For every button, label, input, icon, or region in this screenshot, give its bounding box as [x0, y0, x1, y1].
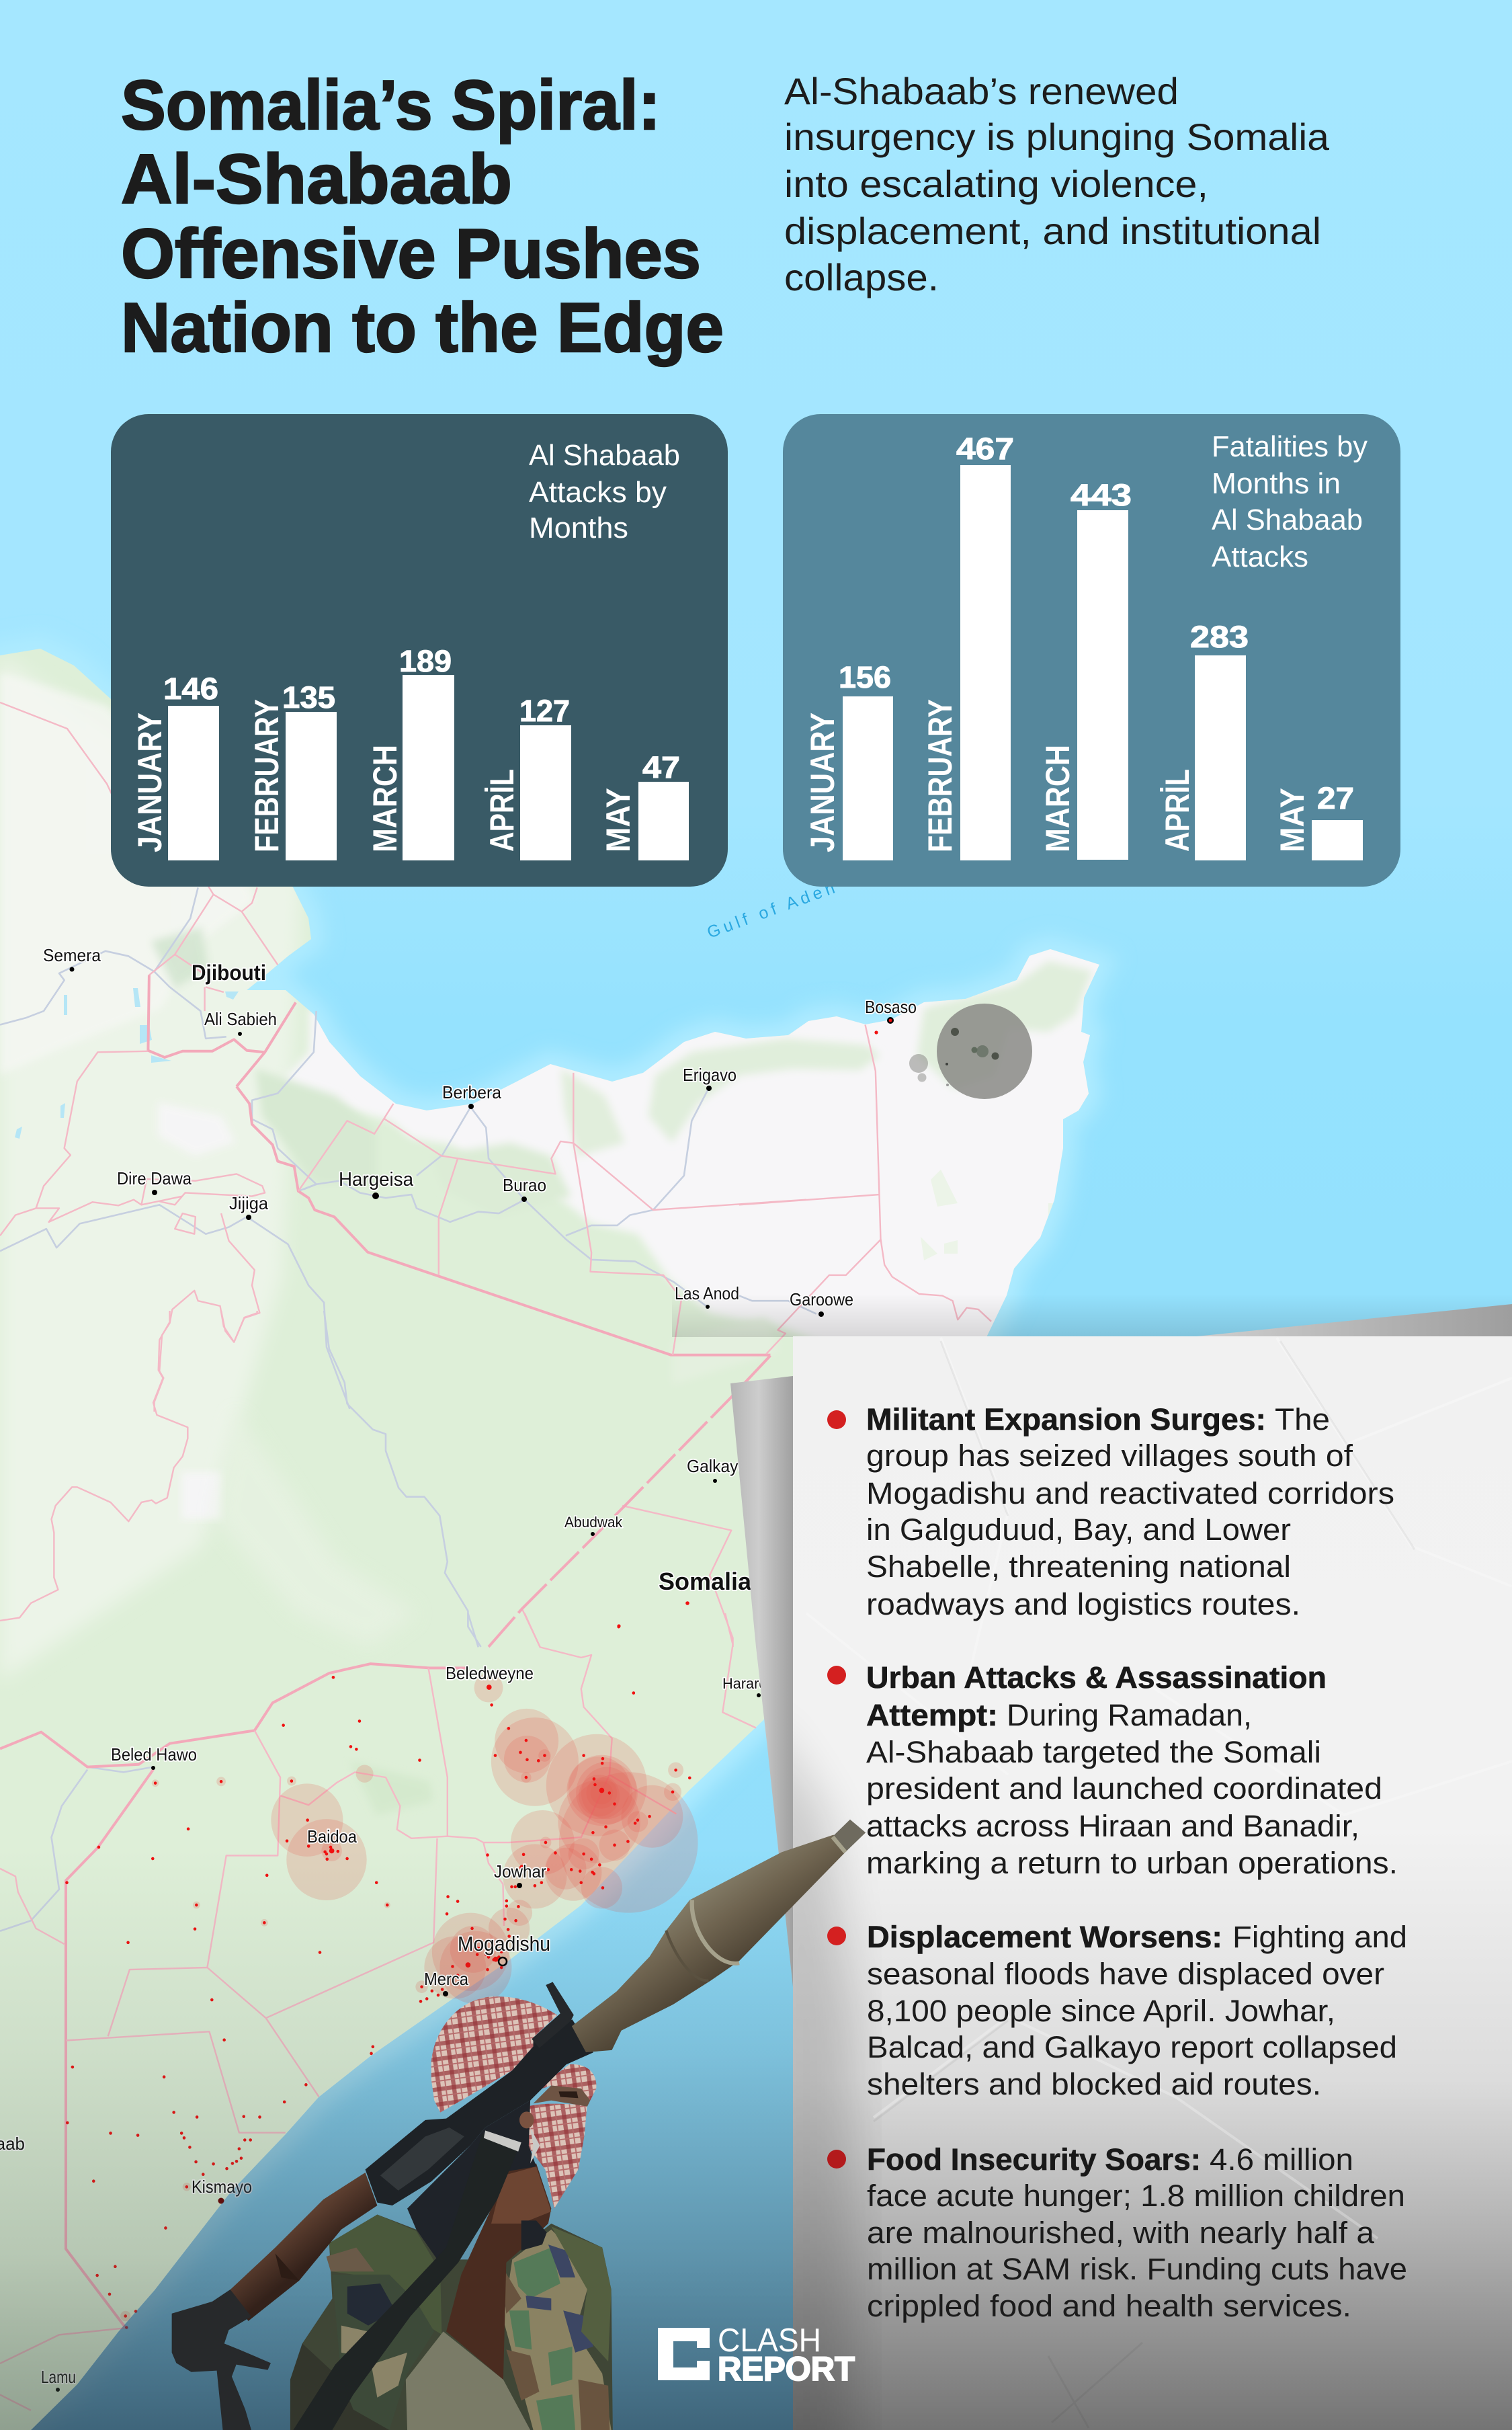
bar values: 47: [642, 750, 680, 784]
bars: [843, 465, 1363, 860]
subtitle: Al-Shabaab’s renewed: [784, 70, 1179, 112]
map labels: Gulf of Aden: [704, 877, 841, 942]
subtitle: displacement, and institutional: [784, 210, 1321, 252]
key point: food insecurity: face acute hunger; 1.8 million children: [867, 2179, 1405, 2213]
chart title: Attacks by: [529, 476, 667, 509]
map labels: Beled Hawo: [111, 1744, 197, 1765]
bar values: [839, 432, 1354, 815]
key point: urban attacks: During Ramadan,: [1007, 1698, 1252, 1732]
logo mark: [658, 2328, 710, 2380]
title: Somalia’s Spiral:: [121, 67, 661, 145]
map labels: Hargeisa: [339, 1169, 414, 1190]
bar values: 135: [282, 680, 335, 715]
launcher stock: [407, 2101, 547, 2263]
sling: [293, 2134, 518, 2430]
vest strap right: [551, 2226, 612, 2361]
gray historic event circles: [909, 1004, 1032, 1099]
month labels: MARCH: [1039, 745, 1077, 852]
lower dark jacket: [290, 2343, 389, 2430]
key point: displacement: seasonal floods have displaced over: [867, 1957, 1384, 1991]
map labels: Semera: [43, 945, 101, 965]
subtitle: collapse.: [784, 256, 939, 298]
soldier figure: [172, 1982, 613, 2430]
land base: [0, 649, 1099, 2430]
map labels: Burao: [503, 1175, 546, 1195]
sling buckle and finger: [484, 2128, 540, 2164]
key point: food insecurity: million at SAM risk. Funding cuts have: [867, 2252, 1407, 2286]
rivers: [0, 887, 816, 1931]
logo wordmark: CLASH: [718, 2322, 821, 2359]
map labels: Somalia: [659, 1568, 752, 1595]
panel: attacks by month: [111, 414, 728, 887]
bar values: 127: [519, 694, 570, 728]
RPG warhead: [572, 1820, 866, 2052]
arm and hand: [446, 2164, 551, 2380]
map labels: Bosaso: [865, 997, 917, 1017]
map labels: Las Anod: [675, 1283, 739, 1303]
map labels: Erigavo: [683, 1065, 737, 1085]
key point: food insecurity: Food Insecurity Soars:: [867, 2142, 1201, 2177]
key point: militant expansion: [827, 1402, 1394, 1621]
key point: food insecurity: are malnourished, with nearly half a: [867, 2216, 1375, 2250]
bar values: 443: [1070, 478, 1132, 512]
chart title: Fatalities by: [1212, 430, 1368, 463]
title: [121, 67, 724, 367]
bar values: 156: [839, 660, 891, 694]
month labels: [804, 699, 1311, 852]
key point: displacement: [827, 1920, 1407, 2101]
map labels: Lamu: [41, 2367, 76, 2387]
month labels: APRİL: [483, 769, 521, 852]
subtitle: into escalating violence,: [784, 163, 1208, 205]
month labels: MARCH: [366, 745, 404, 852]
keffiyeh flap: [534, 2064, 596, 2101]
key point: militant expansion: in Galguduud, Bay, and Lower: [866, 1512, 1291, 1547]
key point: urban attacks: Attempt:: [866, 1698, 998, 1732]
coastal shallows: [0, 649, 1099, 2430]
chart title: [529, 439, 680, 544]
bar values: 283: [1190, 620, 1249, 654]
map labels: Djibouti: [192, 961, 266, 985]
month labels: JANUARY: [131, 713, 169, 852]
rear paper sheet left: [730, 1376, 793, 1987]
chest camouflage: [503, 2230, 612, 2430]
key point: food insecurity: 4.6 million: [1210, 2142, 1353, 2177]
key point: food insecurity: [827, 2142, 1407, 2323]
bars: [168, 675, 689, 860]
rear paper sheet top: [1197, 1304, 1512, 1338]
key point: urban attacks: [827, 1660, 1398, 1880]
key point: displacement: Balcad, and Galkayo report collapsed: [867, 2030, 1397, 2064]
green vest left: [329, 2214, 442, 2335]
bar values: [163, 644, 680, 784]
map labels: Kismayo: [192, 2177, 252, 2197]
sleeve tan: [406, 2332, 530, 2430]
soldier with RPG: [172, 1820, 866, 2430]
chart title: Attacks: [1212, 540, 1308, 573]
map labels: Dire Dawa: [117, 1168, 192, 1188]
key point: displacement: 8,100 people since April. Jowhar,: [867, 1994, 1335, 2028]
map labels: Abudwak: [564, 1514, 623, 1531]
map labels: Galkayo: [687, 1456, 747, 1476]
month labels: FEBRUARY: [921, 699, 959, 852]
key point: militant expansion: roadways and logistics routes.: [866, 1587, 1300, 1621]
logo wordmark: [718, 2322, 855, 2388]
month labels: APRİL: [1159, 769, 1196, 852]
month labels: MAY: [1273, 788, 1311, 852]
face: [534, 2085, 590, 2107]
key point: urban attacks: Urban Attacks & Assassination: [866, 1660, 1327, 1695]
map labels: Beledweyne: [446, 1663, 534, 1683]
month labels: [131, 699, 637, 852]
shadow above paper: [672, 1294, 1512, 1337]
map labels: Jijiga: [229, 1193, 269, 1213]
chart title: Al Shabaab: [1212, 503, 1363, 536]
map labels: Ali Sabieh: [204, 1009, 277, 1029]
map: [0, 649, 1142, 2430]
key point: militant expansion: Mogadishu and reactivated corridors: [866, 1476, 1394, 1510]
logo: Clash Report: [658, 2322, 855, 2388]
chart title: Months in: [1212, 467, 1341, 500]
key point: urban attacks: Al-Shabaab targeted the Somali: [866, 1735, 1321, 1769]
bar values: 146: [163, 672, 218, 706]
key point: militant expansion: group has seized villages south of: [866, 1439, 1353, 1473]
attack circles: [120, 1673, 698, 2321]
bottom dark gradient over sea: [31, 1901, 793, 2430]
launcher sight: [532, 1982, 574, 2048]
month labels: JANUARY: [804, 713, 841, 852]
key point: displacement: Displacement Worsens:: [867, 1920, 1222, 1954]
keffiyeh head wrap: [431, 1996, 557, 2113]
launcher black tube: [366, 2019, 593, 2205]
key point: displacement: Fighting and: [1232, 1920, 1407, 1954]
torso: [290, 2214, 613, 2430]
key point: militant expansion: Shabelle, threatening national: [866, 1549, 1291, 1584]
launcher wood section: [228, 2173, 377, 2321]
map labels: Berbera: [442, 1082, 502, 1102]
map labels: Jowhar: [494, 1861, 546, 1881]
map labels: Mogadishu: [458, 1932, 550, 1955]
title: Nation to the Edge: [121, 289, 724, 367]
chart title: Al Shabaab: [529, 439, 680, 472]
panel: fatalities by month: [783, 414, 1400, 887]
keffiyeh mask: [528, 2103, 587, 2209]
bar values: 27: [1317, 781, 1354, 815]
launcher rear cap: [172, 2290, 271, 2430]
month labels: FEBRUARY: [248, 699, 286, 852]
title: Offensive Pushes: [121, 215, 701, 293]
northern red dots: [617, 1030, 878, 1628]
map labels: Garoowe: [790, 1289, 853, 1309]
terrain shading: [0, 655, 1142, 1815]
borders: [0, 702, 991, 2411]
map labels: Merca: [424, 1969, 468, 1989]
key point: urban attacks: marking a return to urban operations.: [866, 1846, 1398, 1880]
key point: urban attacks: president and launched coordinated: [866, 1771, 1382, 1806]
lakes: [15, 988, 239, 1139]
month labels: MAY: [599, 788, 637, 852]
left sleeve camouflage: [332, 2275, 434, 2430]
key point: militant expansion: Militant Expansion Surges:: [866, 1402, 1266, 1436]
title: Al-Shabaab: [121, 140, 512, 218]
key point: militant expansion: The: [1275, 1402, 1330, 1436]
red attack dots: [67, 1627, 689, 2328]
key point: urban attacks: attacks across Hiraan and Banadir,: [866, 1809, 1359, 1843]
subtitle: insurgency is plunging Somalia: [784, 116, 1330, 158]
map labels: [0, 877, 917, 2387]
bottom dark gradient over land: [0, 1935, 536, 2430]
city dots: [56, 967, 894, 2392]
map labels: Harardhere: [722, 1675, 796, 1692]
paper panel: [759, 1336, 1512, 2430]
key point: food insecurity: crippled food and health services.: [867, 2289, 1351, 2323]
chart title: [1212, 430, 1368, 573]
subtitle: [784, 70, 1330, 298]
chart title: Months: [529, 512, 628, 544]
bar values: 467: [956, 432, 1014, 466]
logo wordmark: REPORT: [718, 2350, 855, 2388]
bar values: 189: [399, 644, 452, 678]
paper creases: [806, 1338, 1512, 2238]
map labels: Baidoa: [307, 1826, 357, 1847]
key point: displacement: shelters and blocked aid routes.: [867, 2067, 1321, 2101]
